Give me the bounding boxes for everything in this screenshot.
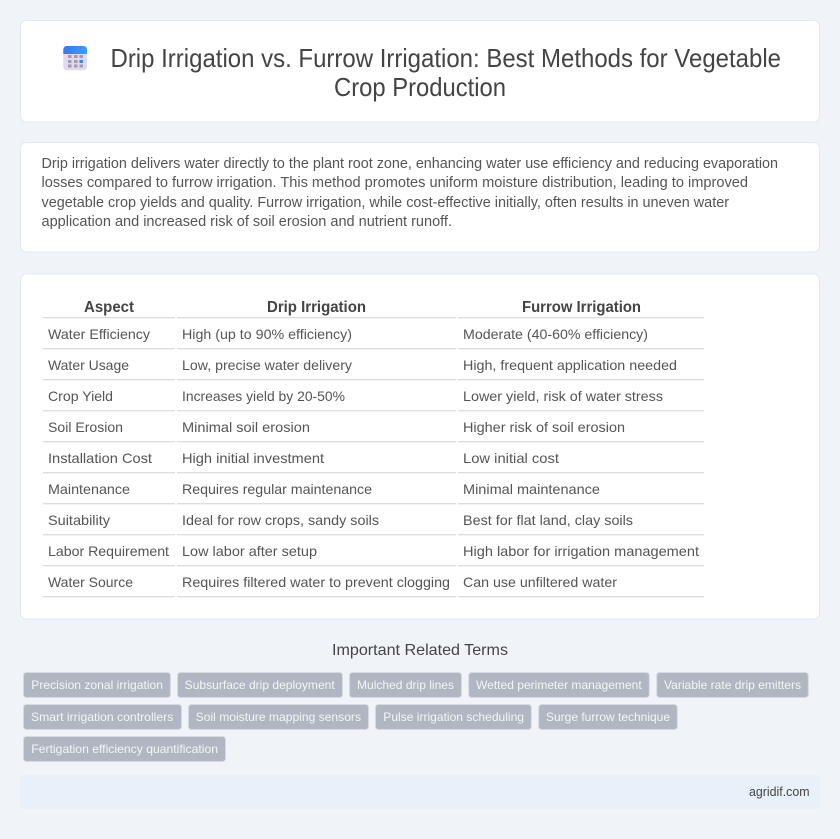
table header row: Aspect (84, 299, 135, 316)
panel: related term tags (24, 672, 808, 762)
row: labor requirement (48, 543, 699, 559)
tag: variable rate drip emitters: Variable rate drip emitters (664, 678, 801, 692)
row: installation cost: Low initial cost (463, 450, 559, 466)
row: water usage: Low, precise water delivery (182, 357, 352, 373)
row: suitability: Best for flat land, clay soils (463, 512, 633, 528)
row: soil erosion: Minimal soil erosion (182, 419, 310, 435)
panel: introduction (20, 142, 820, 252)
text block: introduction paragraph: losses compared to furrow irrigation. This method promotes uniform moisture distribution, leading to improved (42, 175, 748, 191)
tag: smart irrigation controllers: Smart irrigation controllers (31, 710, 173, 724)
tag: soil moisture mapping sensors (188, 704, 368, 730)
tag: fertigation efficiency quantification (24, 736, 226, 762)
row: water usage: High, frequent application needed (463, 357, 677, 373)
tag: fertigation efficiency quantification: Fertigation efficiency quantification (31, 742, 218, 756)
row: soil erosion (48, 419, 625, 435)
row: crop yield: Increases yield by 20-50% (182, 388, 345, 404)
panel: comparison table (20, 274, 820, 619)
row: maintenance (48, 481, 600, 497)
row: suitability (48, 512, 633, 528)
row: water efficiency: Water Efficiency (48, 326, 150, 342)
row: labor requirement: High labor for irrigation management (463, 543, 699, 559)
tag: subsurface drip deployment (178, 672, 342, 698)
table header row (84, 299, 641, 316)
row: water source (48, 574, 617, 590)
tag: surge furrow technique (539, 704, 677, 730)
row: water efficiency (48, 326, 648, 342)
text block: introduction paragraph: application and increased risk of soil erosion and nutrient runoff. (42, 214, 452, 230)
tag: smart irrigation controllers (24, 704, 182, 730)
tag: pulse irrigation scheduling: Pulse irrigation scheduling (383, 710, 524, 724)
row: water source: Requires filtered water to prevent clogging (182, 574, 450, 590)
text block: introduction paragraph: vegetable crop yields and quality. Furrow irrigation, while cost-effective initially, often results in uneven water (42, 195, 729, 211)
tag: wetted perimeter management (469, 672, 649, 698)
title (110, 45, 781, 102)
row: water usage: Water Usage (48, 357, 129, 373)
row: water efficiency: Moderate (40-60% efficiency) (463, 326, 648, 342)
row: suitability: Ideal for row crops, sandy soils (182, 512, 379, 528)
row: installation cost: High initial investment (182, 450, 324, 466)
text block: introduction paragraph: Drip irrigation delivers water directly to the plant root zone, enhancing water use efficiency and reducing evaporation (42, 156, 778, 172)
row: water usage (48, 357, 677, 373)
heading: important related terms: Important Related Terms (332, 642, 508, 659)
tag: mulched drip lines: Mulched drip lines (357, 678, 454, 692)
icon: calendar (63, 46, 87, 70)
row: labor requirement: Labor Requirement (48, 543, 169, 559)
row: soil erosion: Soil Erosion (48, 419, 123, 435)
row: maintenance: Minimal maintenance (463, 481, 600, 497)
tag: variable rate drip emitters (657, 672, 808, 698)
tag: soil moisture mapping sensors: Soil moisture mapping sensors (196, 710, 361, 724)
text block: introduction paragraph (42, 156, 778, 230)
table header row: Furrow Irrigation (522, 299, 641, 316)
title: Drip Irrigation vs. Furrow Irrigation: Best Methods for Vegetable (110, 45, 781, 73)
row: water source: Can use unfiltered water (463, 574, 617, 590)
row: crop yield: Lower yield, risk of water stress (463, 388, 663, 404)
row: soil erosion: Higher risk of soil erosion (463, 419, 625, 435)
panel: header (20, 20, 820, 122)
footer bar (20, 775, 820, 809)
row: installation cost: Installation Cost (48, 450, 152, 466)
footer text: agridif.com (749, 784, 810, 799)
row: crop yield: Crop Yield (48, 388, 113, 404)
title: Crop Production (334, 74, 506, 102)
row: crop yield (48, 388, 663, 404)
tag: mulched drip lines (350, 672, 462, 698)
row: labor requirement: Low labor after setup (182, 543, 317, 559)
tag: subsurface drip deployment: Subsurface drip deployment (185, 678, 335, 692)
row: installation cost (48, 450, 559, 466)
tag: pulse irrigation scheduling (376, 704, 531, 730)
row: water source: Water Source (48, 574, 133, 590)
tag: precision zonal irrigation: Precision zonal irrigation (31, 678, 163, 692)
table header row: Drip Irrigation (267, 299, 366, 316)
row: water efficiency: High (up to 90% efficiency) (182, 326, 352, 342)
row: suitability: Suitability (48, 512, 110, 528)
row: maintenance: Maintenance (48, 481, 130, 497)
row: maintenance: Requires regular maintenance (182, 481, 372, 497)
tag: surge furrow technique: Surge furrow technique (546, 710, 670, 724)
tag: wetted perimeter management: Wetted perimeter management (476, 678, 642, 692)
tag: precision zonal irrigation (24, 672, 170, 698)
